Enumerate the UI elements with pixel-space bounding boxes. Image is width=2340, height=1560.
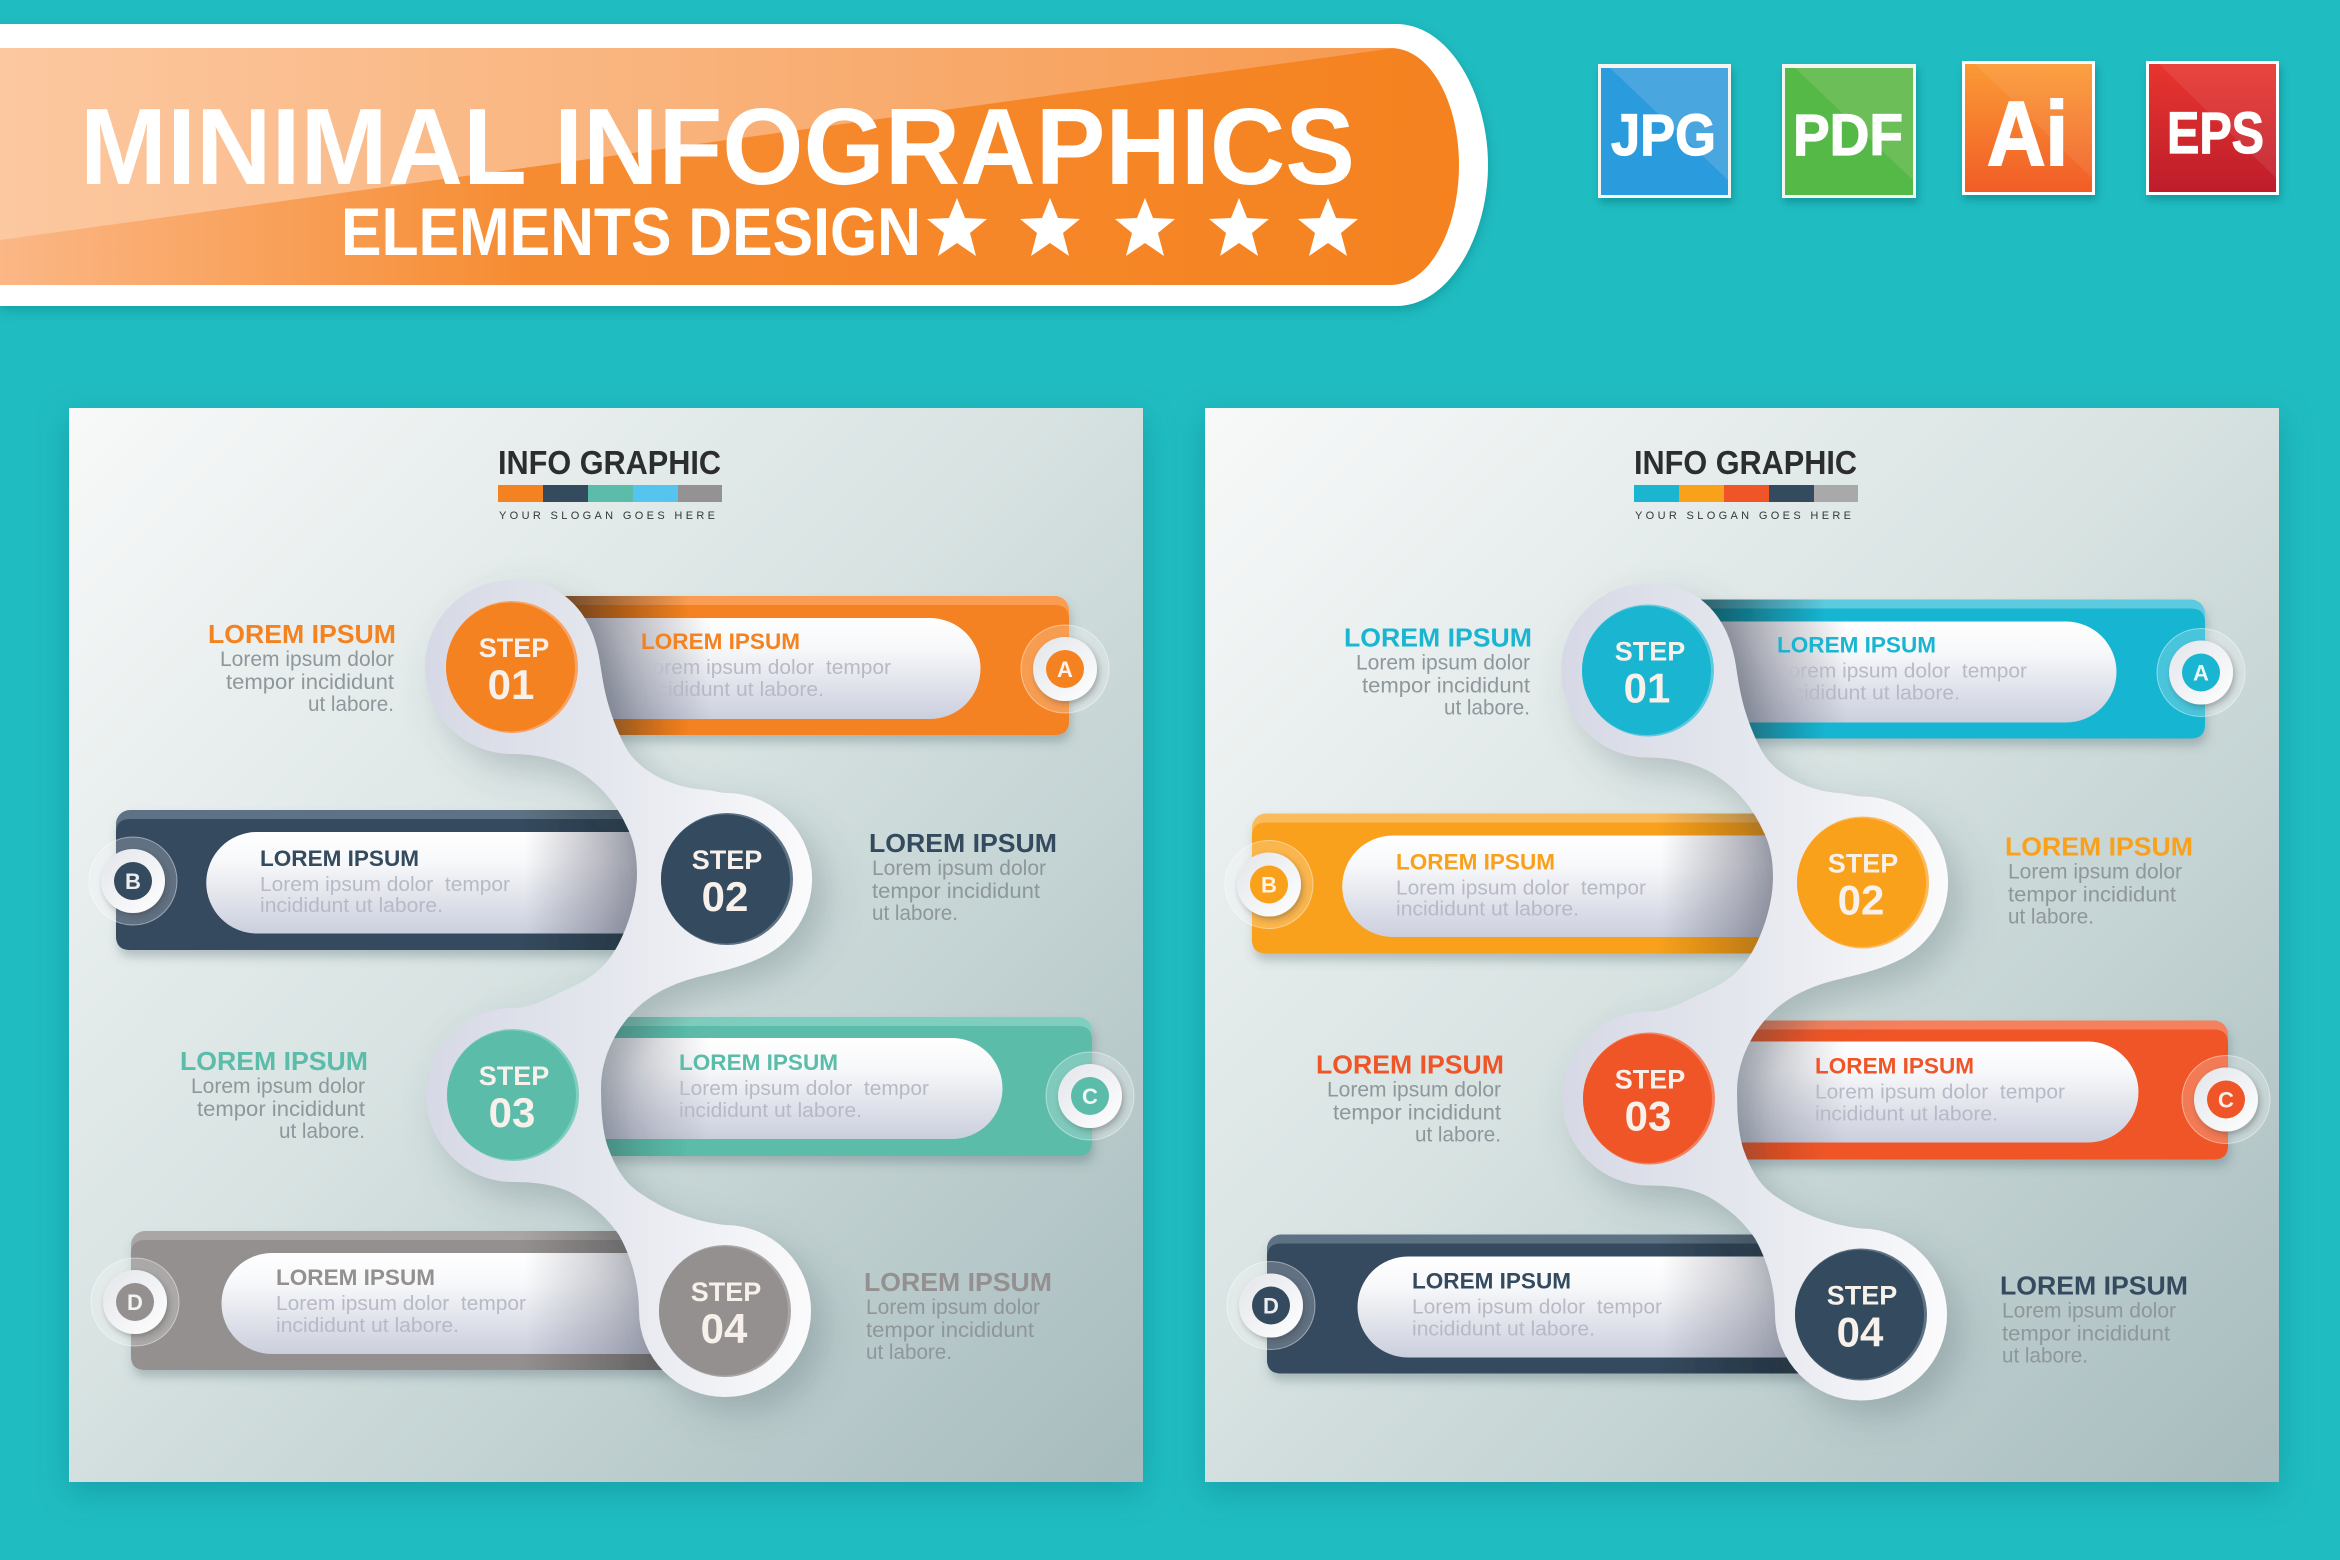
badge D: D [127,1290,143,1315]
side text 03 [180,1046,368,1143]
side text 04: tempor incididunt [2002,1322,2170,1346]
pill C body: incididunt ut labore. [1815,1104,1998,1126]
step 01: 01 [488,661,534,708]
pill D body [276,1293,526,1337]
step 02 [1797,816,1929,948]
title colour strip [498,485,722,502]
pill D heading: LOREM IPSUM [276,1265,435,1290]
bar D [1267,1234,1826,1374]
side text 02 [2005,832,2193,928]
step 03: STEP [1615,1064,1685,1094]
banner white frame [0,24,1488,306]
pill C [1706,1042,2138,1142]
pill D body [1412,1296,1662,1340]
step 04: 04 [701,1305,748,1352]
bar D [131,1231,690,1370]
pill B heading: LOREM IPSUM [1396,850,1555,874]
badge A [1021,625,1109,713]
bar A [540,596,1069,735]
side text 03: ut labore. [1415,1124,1501,1146]
icon: Ai file: Ai [1987,84,2068,185]
step 01 [446,601,578,733]
bar B [1252,814,1816,954]
side text 04 [2000,1270,2188,1368]
step 03 [1583,1032,1715,1164]
pill A [1696,622,2116,722]
step 03: 03 [489,1089,535,1136]
icon: EPS file [2146,61,2279,195]
pill D [221,1253,680,1354]
step 03: STEP [479,1061,549,1091]
side text 03: tempor incididunt [1333,1102,1501,1124]
side text 01: Lorem ipsum dolor [1356,652,1530,674]
panel background [69,408,1143,1482]
badge A: A [1057,657,1073,682]
badge D: D [1263,1294,1279,1318]
side text 01: tempor incididunt [226,671,394,694]
pill B body [260,874,510,917]
side text 02: ut labore. [872,902,958,925]
step 01: STEP [1615,636,1685,666]
pill A heading: LOREM IPSUM [1777,632,1936,658]
step 02: STEP [692,845,762,875]
banner [0,24,1488,306]
icon: JPG file [1598,64,1731,198]
panel title: INFO GRAPHIC [498,444,721,481]
badge D [1227,1262,1315,1350]
pill C [570,1038,1002,1139]
icon: JPG file: JPG [1611,103,1716,168]
pill A body: Lorem ipsum dolor tempor [641,657,891,679]
bar C [560,1017,1092,1156]
banner subtitle: ELEMENTS DESIGN [341,194,921,270]
side text 02: ut labore. [2008,906,2094,928]
step 04: STEP [1827,1280,1897,1310]
step 03: 03 [1625,1092,1671,1140]
side text 02: Lorem ipsum dolor [872,857,1046,880]
bar B [116,810,680,950]
banner orange body [0,48,1459,285]
panel title: INFO GRAPHIC [1634,444,1857,481]
step 02: 02 [702,873,748,920]
icon: PDF file: PDF [1793,103,1903,168]
pill A body: Lorem ipsum dolor tempor [1777,660,2027,682]
pill B [1342,836,1816,937]
badge A: A [2193,660,2209,686]
icon: Ai file [1962,61,2095,195]
side text 04: Lorem ipsum dolor [866,1296,1040,1319]
slogan: YOUR SLOGAN GOES HERE [1635,510,1851,522]
slogan: YOUR SLOGAN GOES HERE [499,510,715,522]
side text 04: ut labore. [2002,1344,2088,1368]
panel: left infographic [69,408,1143,1482]
pill A body: incididunt ut labore. [641,679,824,701]
connector ribbon [1561,583,1948,1400]
pill C body: Lorem ipsum dolor tempor [1815,1082,2065,1104]
icon: PDF file [1782,64,1916,198]
step 02: STEP [1828,848,1898,878]
pill B body: incididunt ut labore. [1396,898,1579,920]
side text 04: ut labore. [866,1341,952,1364]
step 01 [1582,604,1714,736]
step 04 [1795,1248,1927,1380]
step 04: 04 [1837,1308,1884,1356]
title colour strip [1634,485,1858,502]
pill A body [641,657,891,701]
pill A body [1777,660,2027,704]
side text 03 [1316,1050,1504,1146]
pill D body: Lorem ipsum dolor tempor [276,1293,526,1315]
pill C body: Lorem ipsum dolor tempor [679,1078,929,1100]
badge B: B [1261,872,1277,898]
pill C heading: LOREM IPSUM [679,1050,838,1075]
side text 03: LOREM IPSUM [1316,1050,1504,1080]
icon: EPS file: EPS [2167,101,2264,166]
badge C: C [2218,1088,2234,1112]
side text 04 [864,1267,1052,1364]
side text 03: tempor incididunt [197,1098,365,1121]
banner title: MINIMAL INFOGRAPHICS [80,86,1355,208]
badge C [2182,1056,2270,1144]
step 04 [659,1245,791,1377]
pill D body: incididunt ut labore. [1412,1318,1595,1340]
step 04: STEP [691,1277,761,1307]
step 02 [661,813,793,945]
step 02: 02 [1838,876,1884,924]
side text 01: ut labore. [308,693,394,716]
pill D body: incididunt ut labore. [276,1315,459,1337]
pill A body: incididunt ut labore. [1777,682,1960,704]
pill B body: Lorem ipsum dolor tempor [260,874,510,896]
side text 03: Lorem ipsum dolor [191,1075,365,1098]
pill C body [1815,1082,2065,1126]
side text 03: LOREM IPSUM [180,1046,368,1076]
side text 02: LOREM IPSUM [869,828,1057,858]
side text 04: tempor incididunt [866,1319,1034,1342]
bar A [1676,600,2205,738]
pill D body: Lorem ipsum dolor tempor [1412,1296,1662,1318]
pill B [206,832,680,934]
badge B [1225,840,1313,928]
pill C body [679,1078,929,1122]
side text 02 [869,828,1057,925]
badge C: C [1082,1084,1098,1109]
side text 01: LOREM IPSUM [1344,622,1532,652]
panel: right infographic [1205,408,2279,1482]
side text 04: LOREM IPSUM [864,1267,1052,1297]
badge A [2157,628,2245,716]
side text 01: ut labore. [1444,696,1530,720]
side text 02: tempor incididunt [2008,884,2176,906]
bar C [1696,1020,2228,1160]
pill D [1358,1256,1816,1358]
side text 03: ut labore. [279,1120,365,1143]
badge D [91,1258,179,1346]
side text 01: tempor incididunt [1362,674,1530,698]
pill B heading: LOREM IPSUM [260,846,419,871]
icon: five stars [927,198,1358,256]
pill C heading: LOREM IPSUM [1815,1054,1974,1078]
step 03 [447,1029,579,1161]
step 01: STEP [479,633,549,663]
step 01: 01 [1624,664,1670,712]
diagram [1225,583,2270,1400]
banner gloss [0,48,1395,240]
badge C [1046,1052,1134,1140]
badge B [89,837,177,925]
side text 01: LOREM IPSUM [208,619,396,649]
side text 02: tempor incididunt [872,880,1040,903]
pill C body: incididunt ut labore. [679,1100,862,1122]
side text 02: LOREM IPSUM [2005,832,2193,862]
panel background [1205,408,2279,1482]
connector ribbon [425,580,812,1397]
pill A [560,618,980,719]
pill B body: incididunt ut labore. [260,895,443,917]
side text 01 [208,619,396,716]
pill D heading: LOREM IPSUM [1412,1268,1571,1294]
pill B body [1396,878,1646,920]
side text 04: LOREM IPSUM [2000,1270,2188,1300]
pill B body: Lorem ipsum dolor tempor [1396,878,1646,900]
side text 04: Lorem ipsum dolor [2002,1300,2176,1322]
badge B: B [125,869,141,894]
pill A heading: LOREM IPSUM [641,629,800,654]
side text 01: Lorem ipsum dolor [220,648,394,671]
side text 01 [1344,622,1532,720]
side text 03: Lorem ipsum dolor [1327,1078,1501,1102]
side text 02: Lorem ipsum dolor [2008,860,2182,884]
